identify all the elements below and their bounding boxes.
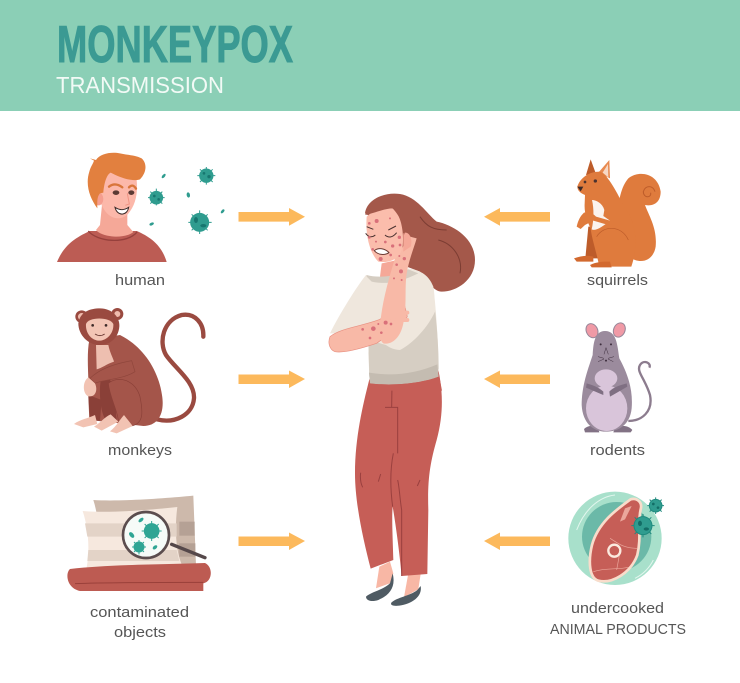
subtitle: TRANSMISSION xyxy=(56,72,224,98)
woman legs xyxy=(355,370,442,606)
arrow: animal products to patient xyxy=(484,532,550,550)
icon: human spreading virus xyxy=(57,153,225,262)
icon: rodent xyxy=(582,321,651,432)
label: undercooked animal products: ANIMAL PRODUCTS xyxy=(550,621,686,638)
icon: infected meat on plate xyxy=(568,492,664,585)
icon: contaminated pillows and blanket xyxy=(67,496,211,591)
woman upper body xyxy=(329,194,475,391)
arrow: human to patient xyxy=(238,208,305,226)
label: contaminated objects xyxy=(90,604,189,641)
label: rodents: rodents xyxy=(590,442,645,459)
figure: sick woman xyxy=(329,194,475,606)
virus particles xyxy=(148,167,225,234)
label: contaminated objects: contaminated xyxy=(90,604,189,621)
arrow: objects to patient xyxy=(238,532,305,550)
label: undercooked animal products: undercooked xyxy=(571,600,664,617)
arrow: squirrels to patient xyxy=(484,208,550,226)
arrow: rodents to patient xyxy=(484,370,550,388)
label: contaminated objects: objects xyxy=(114,624,166,641)
arrow: monkeys to patient xyxy=(238,370,305,388)
header banner xyxy=(0,0,740,111)
title: MONKEYPOX xyxy=(57,16,293,74)
label: monkeys: monkeys xyxy=(108,442,172,459)
label: undercooked animal products xyxy=(550,600,686,638)
icon: squirrel xyxy=(574,159,661,267)
label: squirrels: squirrels xyxy=(587,272,648,289)
label: human: human xyxy=(115,272,165,289)
icon: monkey xyxy=(74,308,203,433)
